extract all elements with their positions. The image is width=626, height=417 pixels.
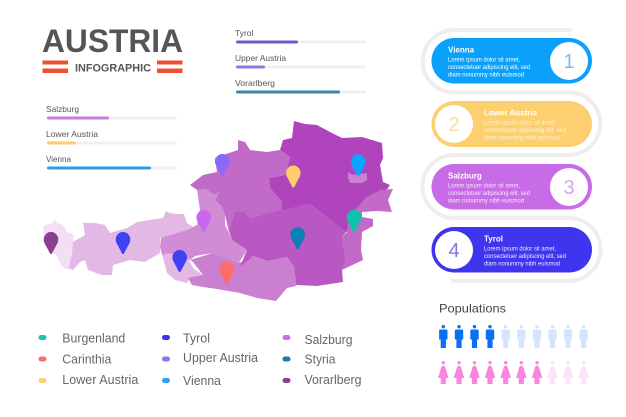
legend: Upper Austria: Upper Austria	[183, 351, 258, 365]
legend: Tyrol: Tyrol	[183, 332, 210, 346]
pin: Salzburg	[196, 210, 211, 232]
bar: Vorarlberg: Vorarlberg	[235, 78, 275, 88]
legend: Vienna	[162, 374, 221, 388]
card: Vienna: 1	[563, 51, 575, 73]
card: Tyrol	[432, 227, 592, 272]
bar: Tyrol: Tyrol	[235, 28, 254, 38]
region: Lower Austria	[269, 121, 390, 232]
card: Lower Austria: Lower Austria	[484, 108, 538, 118]
card: Vienna	[432, 38, 592, 84]
region: Salzburg	[160, 189, 247, 263]
region: Carinthia	[188, 253, 296, 301]
pin: Burgenland	[347, 210, 361, 232]
region: Vorarlberg	[43, 219, 74, 270]
card: Vienna: consectetuer adipiscing elit, sed	[448, 64, 530, 71]
title	[42, 23, 183, 74]
bar: Salzburg: Salzburg	[46, 104, 79, 114]
card: Salzburg: consectetuer adipiscing elit, sed	[448, 190, 530, 197]
heading: Austria: AUSTRIA	[42, 23, 183, 59]
legend: Vienna: Vienna	[183, 374, 221, 388]
region: East Tyrol	[162, 252, 203, 283]
card: Vienna: diam nonummy nibh euismod	[448, 71, 524, 78]
region: Vienna	[348, 172, 367, 183]
legend: Burgenland: Burgenland	[62, 332, 125, 346]
legend: Carinthia	[38, 352, 111, 366]
pin: Vorarlberg	[44, 232, 58, 254]
legend: Carinthia: Carinthia	[62, 352, 111, 366]
region: Styria	[229, 204, 347, 286]
card: Lower Austria: Lorem ipsum dolor sit amet,	[484, 120, 556, 126]
legend: Tyrol	[162, 332, 210, 346]
card: Salzburg: diam nonummy nibh euismod	[448, 197, 524, 204]
legend: Salzburg: Salzburg	[304, 333, 353, 347]
card: Lower Austria: consectetuer adipiscing elit, sed	[484, 127, 566, 134]
populations heading: Populations	[439, 302, 506, 316]
card: Lower Austria	[432, 101, 592, 147]
card: Vienna: Lorem ipsum dolor sit amet,	[448, 56, 520, 64]
legend: Salzburg	[282, 333, 353, 347]
card: Vienna: Vienna	[448, 46, 475, 54]
card: Tyrol: Lorem ipsum dolor sit amet,	[484, 246, 556, 252]
pin: Lower Austria	[286, 166, 301, 188]
card: Salzburg: Lorem ipsum dolor sit amet,	[448, 182, 520, 190]
card: Tyrol: Tyrol	[484, 234, 503, 244]
connector track	[423, 30, 601, 281]
pin: Styria	[290, 227, 305, 249]
pin: Carinthia	[219, 262, 234, 284]
card: Tyrol: 4	[448, 240, 460, 262]
bar: Upper Austria: Upper Austria	[235, 53, 286, 63]
legend: Lower Austria: Lower Austria	[62, 373, 138, 387]
legend: Styria	[282, 352, 336, 366]
pin: Upper Austria	[215, 154, 230, 176]
progress bars: top	[235, 28, 366, 94]
pin: Tyrol	[116, 232, 130, 254]
bar: Vienna: Vienna	[46, 154, 71, 164]
pin: East Tyrol	[172, 250, 187, 272]
flag left	[42, 60, 68, 73]
card: Lower Austria: 2	[448, 114, 460, 136]
card: Tyrol: diam nonummy nibh euismod	[484, 260, 560, 267]
map of Austria	[43, 121, 393, 301]
card: Salzburg: Salzburg	[448, 172, 482, 180]
subheading: Infographic: INFOGRAPHIC	[75, 62, 151, 74]
legend	[38, 332, 362, 388]
card: Salzburg: 3	[563, 177, 575, 199]
region: Upper Austria	[190, 140, 290, 232]
card: Tyrol: consectetuer adipiscing elit, sed	[484, 253, 566, 260]
region: Burgenland	[342, 189, 393, 270]
card: Lower Austria: diam nonummy nibh euismod	[484, 134, 560, 141]
women pictogram row	[438, 361, 589, 384]
card: Salzburg	[432, 164, 592, 210]
populations	[438, 302, 589, 384]
legend: Styria: Styria	[304, 352, 336, 366]
progress bars: left	[46, 104, 177, 170]
region: Tyrol	[69, 211, 193, 275]
flag right	[157, 60, 182, 73]
pin: Vienna	[351, 154, 366, 176]
legend: Vorarlberg: Vorarlberg	[304, 373, 362, 387]
bar: Lower Austria: Lower Austria	[46, 129, 98, 139]
men pictogram row	[439, 325, 588, 348]
